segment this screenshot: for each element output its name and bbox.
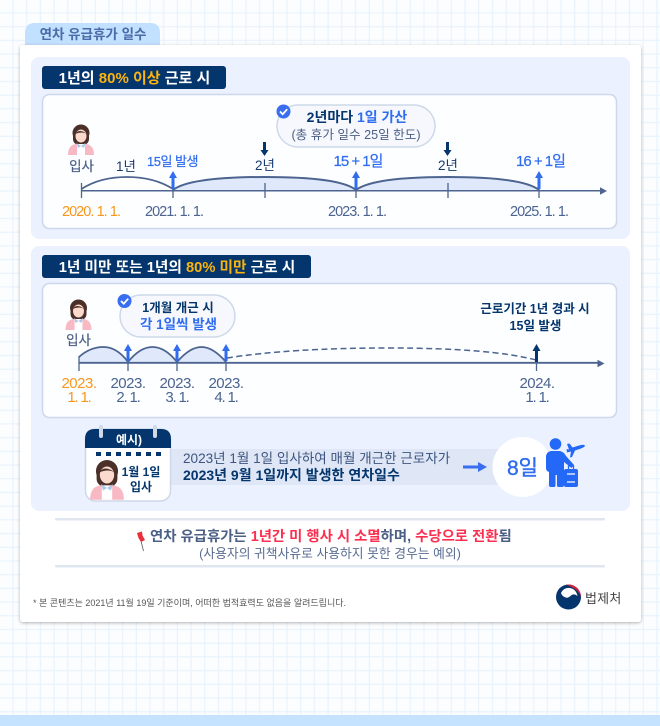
labels: dates: 3. 1.	[165, 389, 189, 406]
labels: two-year	[255, 158, 458, 173]
labels: dates: 2023. 1. 1.	[328, 204, 386, 220]
label: join: 입사	[69, 159, 94, 174]
labels: dates: 2021. 1. 1.	[145, 204, 203, 220]
text: notice main: 연차 유급휴가는 1년간 미 행사 시 소멸하며, 수당으로 전환됨	[150, 528, 512, 545]
text: notice sub: (사용자의 귀책사유로 사용하지 못한 경우는 예외)	[199, 546, 461, 561]
labels: dates: 2023.	[61, 375, 97, 392]
example band	[170, 449, 514, 485]
callout: monthly: 1개월 개근 시	[142, 300, 214, 315]
title tab: 연차 유급휴가 일수	[40, 27, 146, 42]
label: join: 입사	[66, 333, 91, 348]
icon: traveller	[546, 438, 585, 487]
heading: 80% or more	[42, 66, 226, 89]
bottom band	[0, 715, 660, 726]
labels: accrual: 15 + 1일	[334, 153, 383, 170]
labels: dates: 1. 1.	[67, 389, 91, 406]
arrows: two-year markers	[260, 142, 452, 156]
icon: calendar: 입사	[130, 480, 152, 494]
icon: calendar: 예시)	[116, 433, 142, 447]
logo: Ministry of Government Legislation	[556, 584, 621, 610]
icon: calendar	[85, 425, 171, 501]
icon: calendar: 1월 1일	[122, 464, 160, 479]
labels: dates: 2. 1.	[116, 389, 140, 406]
heading: 80% or more: 1년의 80% 이상 근로 시	[59, 70, 210, 87]
footnote: * 본 콘텐츠는 2021년 11월 19일 기준이며, 어떠한 법적효력도 없음을 알려드립니다.	[33, 597, 346, 608]
icon: employee	[68, 124, 94, 155]
callout: monthly: 각 1일씩 발생	[140, 317, 217, 332]
labels: two-year: 2년	[255, 158, 275, 173]
labels: dates: 2023.	[159, 375, 195, 392]
arrows: monthly accrual	[124, 344, 230, 361]
label: after one year	[480, 301, 590, 333]
heading: under 80%: 1년 미만 또는 1년의 80% 미만 근로 시	[59, 259, 295, 276]
text: example: 2023년 9월 1일까지 발생한 연차일수	[183, 467, 400, 483]
panel: 80% or more	[31, 57, 630, 239]
labels: dates: 1. 1.	[525, 389, 549, 406]
labels: dates: 2020. 1. 1.	[62, 204, 120, 220]
icon: employee	[66, 300, 92, 330]
panel: under 80%	[31, 246, 630, 511]
result: 8 days: 8일	[507, 457, 538, 480]
labels: accrual	[147, 153, 565, 170]
labels: dates	[61, 375, 555, 406]
label: after one year: 15일 발생	[510, 319, 561, 333]
arrow: result	[463, 462, 487, 472]
labels: dates: 2024.	[519, 375, 555, 392]
heading: under 80%	[42, 255, 311, 278]
labels: accrual: 15일 발생	[147, 154, 198, 169]
text: example	[183, 451, 451, 483]
logo: Ministry of Government Legislation: 법제처	[585, 591, 621, 606]
main card	[20, 45, 641, 622]
label: 1 year: 1년	[116, 159, 136, 174]
arrows: accrual	[169, 171, 543, 189]
labels: dates: 4. 1.	[214, 389, 238, 406]
labels: two-year: 2년	[438, 158, 458, 173]
callout: monthly	[118, 294, 235, 337]
label: after one year: 근로기간 1년 경과 시	[480, 301, 590, 316]
labels: dates	[62, 204, 568, 220]
labels: dates: 2023.	[208, 375, 244, 392]
timeline chart: monthly accrual	[79, 344, 604, 371]
timeline card	[42, 94, 616, 228]
text: example: 2023년 1월 1일 입사하여 매월 개근한 근로자가	[183, 451, 451, 466]
icon: pin	[137, 532, 145, 551]
timeline chart: yearly accrual	[81, 142, 607, 198]
arrow: one-year accrual	[532, 344, 540, 362]
title tab	[25, 23, 160, 50]
notice box	[55, 518, 605, 568]
callout: every two years	[276, 104, 435, 147]
callout: every two years: (총 휴가 일수 25일 한도)	[291, 128, 421, 142]
labels: accrual: 16 + 1일	[516, 153, 565, 170]
result: 8 days	[492, 437, 552, 497]
labels: dates: 2023.	[110, 375, 146, 392]
timeline card	[42, 284, 616, 418]
callout: every two years: 2년마다 1일 가산	[307, 109, 407, 125]
labels: dates: 2025. 1. 1.	[510, 204, 568, 220]
